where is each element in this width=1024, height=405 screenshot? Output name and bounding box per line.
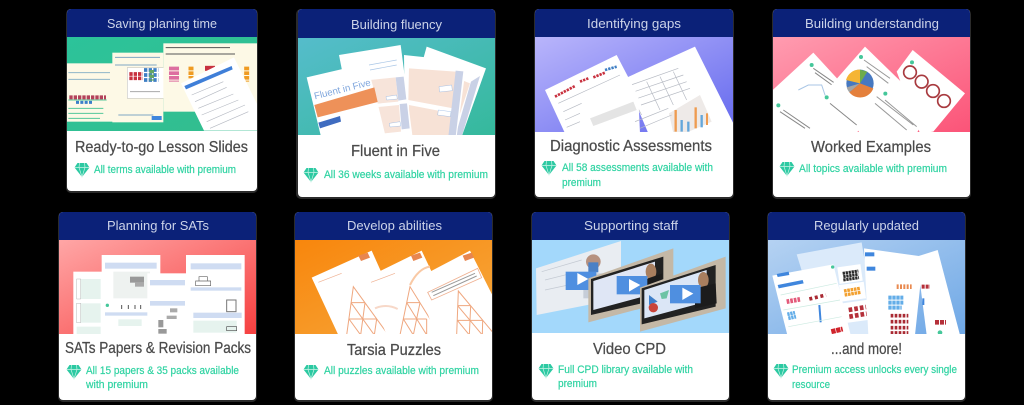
icon: gem bbox=[538, 364, 554, 378]
card: SATs Papers & Revision Packs bbox=[58, 212, 257, 402]
heading: Building fluency bbox=[351, 17, 442, 32]
heading: Develop abilities bbox=[347, 218, 442, 233]
heading: Planning for SATs bbox=[107, 218, 209, 233]
card header bbox=[532, 212, 729, 240]
card: and more bbox=[767, 212, 966, 402]
availability text continued: resource bbox=[792, 379, 830, 391]
card title: Diagnostic Assessments bbox=[550, 138, 712, 155]
card: Fluent in Five bbox=[296, 9, 496, 199]
availability text continued: premium bbox=[562, 177, 601, 189]
image: worksheets: Fluent in Five bbox=[313, 78, 372, 102]
availability text: All 58 assessments available with bbox=[562, 162, 713, 174]
heading: Identifying gaps bbox=[587, 16, 682, 31]
card title: Fluent in Five bbox=[351, 143, 440, 160]
availability text: Full CPD library available with bbox=[558, 364, 693, 376]
image: puzzles bbox=[295, 240, 495, 335]
image: assessments bbox=[535, 37, 733, 133]
card: Video CPD bbox=[531, 212, 730, 402]
card header bbox=[298, 9, 495, 38]
availability text: All 15 papers & 35 packs available bbox=[86, 365, 239, 377]
card header bbox=[535, 9, 733, 37]
availability text: Premium access unlocks every single bbox=[792, 364, 957, 376]
image: lesson slides bbox=[67, 37, 258, 131]
availability text: All puzzles available with premium bbox=[324, 365, 479, 377]
card: Ready-to-go Lesson Slides bbox=[66, 9, 258, 193]
availability text: All 36 weeks available with premium bbox=[324, 169, 488, 181]
card header bbox=[773, 9, 970, 37]
card header bbox=[67, 9, 257, 37]
heading: Regularly updated bbox=[814, 218, 919, 233]
card: Worked Examples bbox=[772, 9, 971, 199]
availability text: All terms available with premium bbox=[94, 164, 236, 176]
card: Diagnostic Assessments bbox=[534, 9, 734, 199]
card title: Worked Examples bbox=[811, 139, 931, 156]
image: worksheets bbox=[298, 38, 495, 137]
icon: gem bbox=[304, 168, 318, 182]
image: worked examples bbox=[773, 37, 970, 133]
card title: ...and more! bbox=[831, 341, 902, 358]
heading: Supporting staff bbox=[584, 218, 678, 233]
card header bbox=[59, 212, 256, 240]
icon: gem bbox=[774, 364, 788, 378]
heading: Building understanding bbox=[805, 16, 939, 31]
card title: Video CPD bbox=[593, 341, 666, 358]
availability text continued: premium bbox=[558, 378, 597, 390]
icon: gem bbox=[74, 163, 90, 177]
availability text: All topics available with premium bbox=[799, 163, 947, 175]
image: video thumbnails bbox=[532, 240, 729, 333]
card header bbox=[768, 212, 965, 240]
card title: Tarsia Puzzles bbox=[347, 342, 441, 359]
image: worksheets bbox=[768, 240, 965, 335]
card title: Ready-to-go Lesson Slides bbox=[75, 139, 248, 156]
availability text continued: with premium bbox=[85, 379, 148, 391]
icon: gem bbox=[780, 162, 794, 176]
heading: Saving planing time bbox=[107, 16, 217, 31]
icon: gem bbox=[304, 365, 318, 379]
icon: gem bbox=[66, 365, 82, 379]
card header bbox=[295, 212, 492, 240]
image: SATs papers bbox=[59, 240, 256, 335]
card: Tarsia Puzzles bbox=[294, 212, 495, 402]
card title: SATs Papers & Revision Packs bbox=[65, 340, 251, 357]
icon: gem bbox=[542, 161, 556, 175]
